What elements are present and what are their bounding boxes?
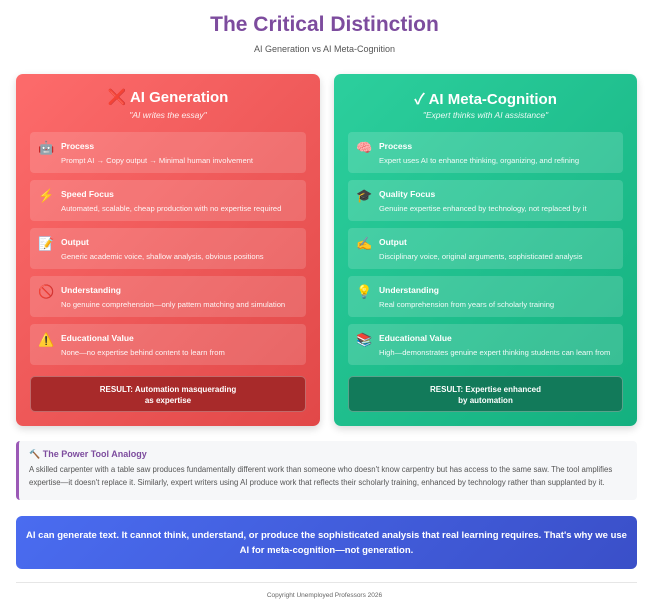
item: speed: ⚡ xyxy=(38,188,54,203)
item: understanding: No genuine comprehension—only pattern matching and simulation xyxy=(61,300,285,309)
item: process: Process xyxy=(61,141,94,151)
item: output: Output xyxy=(379,237,407,247)
panel quote: "AI writes the essay" xyxy=(129,110,207,120)
conclusion banner: AI for meta-cognition—not generation. xyxy=(240,545,413,556)
subtitle: AI Generation vs AI Meta-Cognition xyxy=(254,44,395,54)
item: output: 📝 xyxy=(38,236,54,251)
item: educational value: ⚠️ xyxy=(38,332,54,347)
result box: by automation xyxy=(458,396,513,405)
item: process xyxy=(30,132,306,173)
item: process: 🤖 xyxy=(38,140,54,155)
conclusion banner: AI can generate text. It cannot think, understand, or produce the sophisticated analysis that real learning requires. That's why we use xyxy=(26,530,627,541)
item: educational value xyxy=(348,324,623,365)
item: understanding: Understanding xyxy=(61,285,121,295)
result box xyxy=(348,376,623,412)
item: understanding xyxy=(30,276,306,317)
item: quality: Quality Focus xyxy=(379,189,435,199)
item: output: Output xyxy=(61,237,89,247)
item: output: Disciplinary voice, original arguments, sophisticated analysis xyxy=(379,252,582,261)
panel quote: "Expert thinks with AI assistance" xyxy=(423,110,548,120)
item: educational value: Educational Value xyxy=(379,333,452,343)
item: output xyxy=(30,228,306,269)
item: speed: Automated, scalable, cheap production with no expertise required xyxy=(61,204,281,213)
conclusion banner xyxy=(16,516,637,569)
panel heading: ❌ AI Generation xyxy=(108,89,228,106)
item: educational value: 📚 xyxy=(356,332,372,347)
item: speed xyxy=(30,180,306,221)
item: understanding: Understanding xyxy=(379,285,439,295)
item: quality xyxy=(348,180,623,221)
item: educational value: Educational Value xyxy=(61,333,134,343)
item: understanding: Real comprehension from years of scholarly training xyxy=(379,300,554,309)
item: quality: 🎓 xyxy=(356,188,372,203)
item: output: Generic academic voice, shallow analysis, obvious positions xyxy=(61,252,264,261)
panel heading: ✓ AI Meta-Cognition xyxy=(414,91,557,108)
result box: as expertise xyxy=(145,396,191,405)
item: educational value: None—no expertise behind content to learn from xyxy=(61,348,225,357)
footer: Copyright Unemployed Professors 2026 xyxy=(267,592,382,599)
item: process: 🧠 xyxy=(356,140,372,155)
item: understanding: 🚫 xyxy=(38,284,54,299)
analogy heading: 🔨 The Power Tool Analogy xyxy=(29,449,147,459)
item: quality: Genuine expertise enhanced by technology, not replaced by it xyxy=(379,204,587,213)
panel: AI Generation xyxy=(16,74,320,426)
item: speed: Speed Focus xyxy=(61,189,114,199)
item: understanding: 💡 xyxy=(356,284,372,299)
result box: RESULT: Automation masquerading xyxy=(100,385,236,394)
analogy box xyxy=(16,441,637,500)
item: process: Prompt AI → Copy output → Minimal human involvement xyxy=(61,156,253,165)
result box: RESULT: Expertise enhanced xyxy=(430,385,541,394)
item: understanding xyxy=(348,276,623,317)
item: output: ✍️ xyxy=(356,236,372,251)
result box xyxy=(30,376,306,412)
item: educational value: High—demonstrates genuine expert thinking students can learn from xyxy=(379,348,610,357)
item: output xyxy=(348,228,623,269)
title: The Critical Distinction xyxy=(210,13,439,36)
item: educational value xyxy=(30,324,306,365)
analogy text: A skilled carpenter with a table saw produces fundamentally different work than someone who doesn't know carpentry but has access to the same saw. The tool amplifies expertise—it doesn't replace it. Similarly, expert writers using AI produce work that reflects their scholarly training, enhanced by technology rather than supplanted by it. xyxy=(29,465,612,486)
item: process: Process xyxy=(379,141,412,151)
item: process: Expert uses AI to enhance thinking, organizing, and refining xyxy=(379,156,579,165)
item: process xyxy=(348,132,623,173)
panel: AI Meta-Cognition xyxy=(334,74,637,426)
